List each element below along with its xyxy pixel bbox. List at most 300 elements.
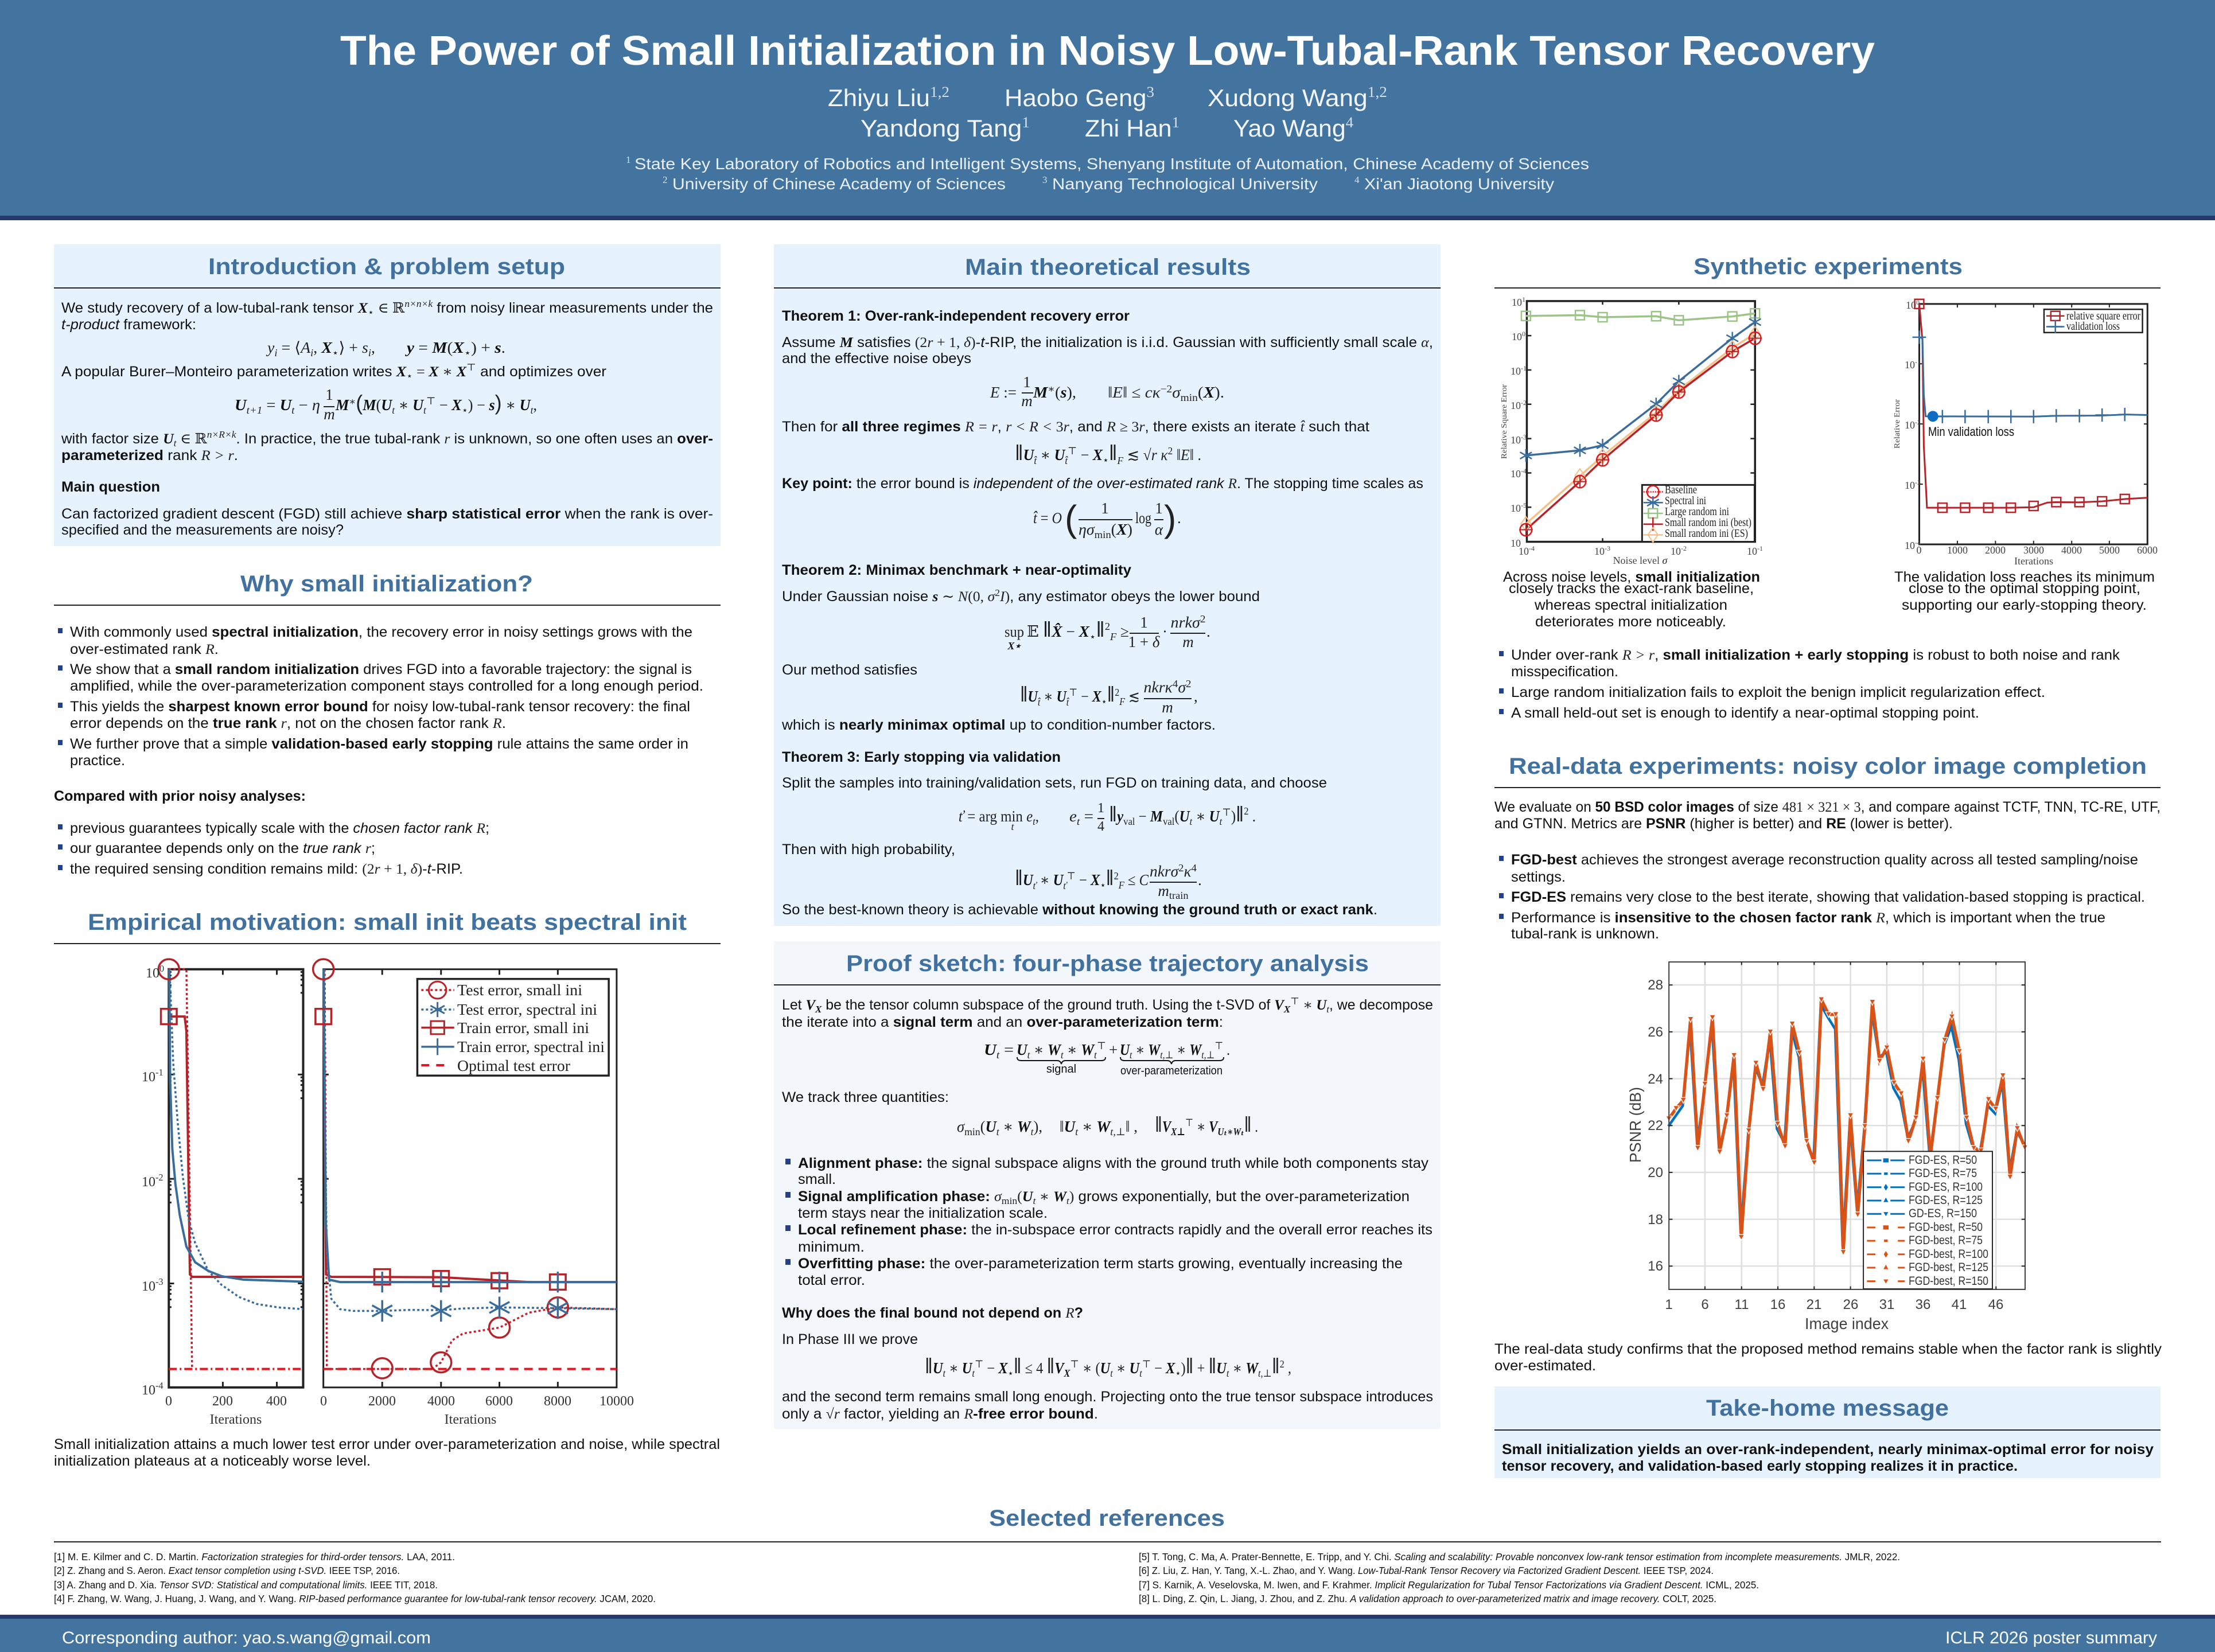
text block: decomposition intro: X [1283,1004,1291,1015]
equation: minimax lower bound: ≥ [1116,623,1129,640]
panel: introduction and problem setup [54,244,721,546]
bullet list: synthetic takeaways: A small held-out set is enough to identify a near-optimal stopping point. [1511,705,1979,721]
equation: phase III bound: t,⊥ [1258,1367,1272,1379]
equation: effective noise: σ [1172,384,1181,401]
chart labels: 1 [1522,295,1525,303]
equation: minimax lower bound: sup [1005,624,1024,640]
equation: effective noise: min [1181,392,1198,403]
equation: measurement model: ⟩ + [338,339,362,356]
bullet list: four phases: ) [1069,1189,1074,1205]
equation: phase III bound: U [1130,1359,1140,1377]
reference list: right column: [8] L. Ding, Z. Qin, L. Jiang, J. Zhou, and Z. Zhu. A validation approach to over-parameterized matrix and image recovery. COLT, 2025. [1139,1593,1716,1604]
theorem 2: 2 [995,587,1000,598]
axis labels: 16 [1770,1297,1785,1312]
chart labels: 6000 [2137,544,2158,556]
equation: phase III bound: 2 [1280,1358,1284,1370]
equation: gradient update: ⋆ [462,404,468,416]
equation: validation stopping rule: = [1080,808,1093,825]
header banner [0,0,2215,220]
chart labels [1893,298,2158,567]
chart labels: relative square error [2066,310,2140,322]
text block: dataset [1494,799,2160,832]
equation: minimax lower bound: ⋆ [1089,631,1096,642]
equation: stopping time: . [1177,509,1181,527]
panel: selected references [54,1506,2161,1604]
chart labels: 10 [1747,546,1757,557]
theorem 1: Key point: the error bound is independent of the over-estimated rank R. The stopping time scales as [782,476,1423,492]
axis labels: 10000 [600,1394,634,1409]
equation: stopping time: X) [1116,521,1132,538]
equation: measurement model: i [368,347,371,359]
text block: decomposition intro: ⊤ [1290,996,1299,1007]
axis labels [1626,977,2003,1332]
equation: phase III bound: U [962,1359,973,1377]
minimum validation loss marker [1928,411,1938,422]
panel: empirical motivation [54,910,721,1469]
equation: minimax lower bound: X⋆ [1007,640,1021,652]
chart labels: 10 [1905,419,1915,431]
chart labels: 10 [1905,359,1915,371]
equation: validation stopping rule: t [1190,816,1193,827]
equation: gradient update: s) ∗ U [489,391,531,415]
reference list: left column: [1] M. E. Kilmer and C. D. Martin. Factorization strategies for third-order tensors. LAA, 2011. [54,1551,455,1563]
equation: signal and over-parameterization decomposition: U [1017,1041,1028,1058]
axis labels: 28 [1648,977,1663,993]
equation: tracked quantities: ∗ [1193,1118,1209,1135]
legend labels: FGD-ES, R=125 [1909,1194,1983,1207]
equation: early stopping bound: − [1076,871,1091,889]
equation: phase III bound: ∗ [1229,1359,1245,1377]
axis labels: 11 [1735,1297,1749,1312]
bullet list: four phases: minimum. [798,1239,865,1255]
equation: signal and over-parameterization decomposition: t [1094,1049,1097,1061]
affiliations: 3 [1042,174,1048,185]
chart labels: Small random ini (ES) [1665,527,1748,540]
equation: stopping time [1033,498,1181,540]
equation: recovery bound: 2 [1168,445,1173,457]
equation: signal and over-parameterization decomposition: t [1130,1049,1132,1061]
affiliations: 2 [663,174,668,185]
equation: upper bound: ∗ [1040,688,1057,705]
equation: measurement model: X [321,339,333,356]
equation: gradient update: t [531,404,534,416]
equation: stopping time: α [1155,521,1163,538]
bullet list: main claims: amplified, while the over-parameterization component stays controlled for a long enough period. [70,678,703,694]
text block: recovery setup: n×n×k [404,298,433,309]
chart labels: Iterations [2014,555,2053,567]
equation: phase III bound: ⊤ [1142,1358,1151,1370]
chart labels: Relative Error [1893,399,1902,449]
panel: take-home message [1494,1386,2160,1478]
axis labels: Image index [1805,1315,1889,1332]
heading: introduction: Introduction & problem setup [208,254,565,279]
equation: recovery bound: E‖ . [1181,446,1202,463]
equation: measurement model: s [362,339,368,356]
axis labels: Iterations [210,1412,262,1427]
chart labels: validation loss [2066,320,2120,333]
chart labels: -4 [1521,467,1527,475]
corresponding author: Corresponding author: yao.s.wang@gmail.com [62,1628,431,1647]
equation: gradient update: ) − [468,396,489,414]
equation: gradient update: t [392,404,395,416]
text block: dataset: We evaluate on 50 BSD color images of size 481 × 321 × 3, and compare against TCTF, TNN, TC-RE, UTF, [1494,799,2160,815]
equation: gradient update: 1 [325,386,333,403]
axis labels: 10 [142,1383,155,1398]
text block: take-home message: Small initialization yields an over-rank-independent, nearly minimax-optimal error for noisy [1502,1441,2154,1458]
text block: decomposition intro: V [1274,998,1285,1013]
equation: tracked quantities: U [986,1118,997,1135]
legend labels: FGD-best, R=100 [1909,1248,1988,1261]
equation: early stopping bound: ⋆ [1100,879,1106,891]
equation: tracked quantities: ( [980,1118,986,1135]
equation: stopping time: min [1095,529,1111,540]
reference list: right column [1139,1551,1900,1604]
chart labels: 4000 [2061,544,2082,556]
text block: real-data conclusion: over-estimated. [1494,1358,1596,1374]
theorem 3: Split the samples into training/validation sets, run FGD on training data, and choose [782,775,1327,791]
bullet list: main claims: With commonly used spectral initialization , the recovery error in noisy settings grows with the [70,624,692,640]
equation: tracked quantities: ∗ [1078,1118,1096,1135]
equation: measurement model: A [301,339,310,356]
text: tracked quantities: We track three quantities: [782,1089,949,1105]
chart labels: 10 [1511,400,1521,411]
legend labels: FGD-ES, R=75 [1909,1167,1977,1180]
equation: validation stopping rule: t [1077,816,1080,827]
equation: gradient update: η [312,396,320,414]
equation: early stopping bound: 2 [1178,862,1184,874]
equation: measurement model: i [274,347,278,359]
chart labels: Noise level σ [1613,555,1668,566]
text block: over-parameterized rank: t [174,438,177,449]
equation: tracked quantities: min [964,1126,980,1137]
bullet list: synthetic takeaways: Under over-rank R > r, small initialization + early stopping is robust to both noise and rank [1511,647,2120,663]
equation: upper bound: ‖ [1107,683,1115,706]
reference list: left column: [3] A. Zhang and D. Xia. Tensor SVD: Statistical and computational limits. IEEE TIT, 2018. [54,1579,438,1591]
text block: over-parameterized rank: ∈ ℝ [177,431,207,447]
equation: validation stopping rule: t [1011,821,1014,832]
text block: take-home message: tensor recovery, and validation-based early stopping realizes it in practice. [1502,1458,2018,1474]
equation: upper bound: ⊤ [1069,687,1077,698]
equation: gradient update: , [533,396,537,414]
equation: gradient update: X [451,396,462,414]
axis labels: 20 [1648,1165,1663,1180]
text block: closing argument [782,1389,1433,1422]
caption: validation chart [1894,569,2155,613]
equation: tracked quantities: t [1031,1126,1034,1137]
authors: Yao Wang [1233,115,1343,142]
equation: validation stopping rule: M [1150,808,1163,825]
bullet list: four phases: term stays near the initialization scale. [798,1205,1048,1221]
equation: effective noise: s), [1060,384,1076,401]
heading: real-data experiments: Real-data experiments: noisy color image completion [1509,754,2147,779]
title: The Power of Small Initialization in Noisy Low-Tubal-Rank Tensor Recovery [340,28,1875,74]
theorem 1: Assume M satisfies (2r + 1, δ)-t-RIP, the initialization is i.i.d. Gaussian with sufficiently small scale α, [782,334,1433,350]
text block: decomposition intro: U [1316,998,1328,1013]
chart caption: Small initialization attains a much lower test error under over-parameterization and noise, while spectral [54,1436,720,1452]
line chart: relative square error versus noise level [1500,295,1763,566]
axis labels: 36 [1916,1297,1930,1312]
equation: validation stopping rule: t [1033,816,1036,827]
equation: gradient update: = [262,396,280,414]
chart caption: initialization plateaus at a noticeably worse level. [54,1453,371,1469]
equation: phase III bound: − [1151,1359,1166,1377]
text block: decomposition intro: t [1326,1004,1330,1015]
equation: early stopping bound [1015,862,1202,901]
heading: selected references: Selected references [989,1506,1225,1531]
equation: validation stopping rule: ⊤ [1222,806,1231,818]
chart labels: Small random ini (best) [1665,516,1751,529]
equation: gradient update: m [324,406,335,423]
equation: minimax lower bound: · [1162,623,1167,640]
equation: phase III bound: X [998,1359,1008,1377]
equation: upper bound: X [1092,688,1102,705]
affiliations: Nanyang Technological University [1052,175,1318,193]
equation: effective noise: ( [1198,384,1204,401]
chart labels: 10 [1906,299,1916,311]
equation: measurement model: y = M(X [407,339,463,356]
equation: signal and over-parameterization decomposition: U [984,1041,995,1058]
authors: 4 [1346,114,1353,131]
equation: stopping time: log [1135,509,1151,527]
heading: main results: Main theoretical results [965,255,1251,280]
legend labels: Optimal test error [457,1057,570,1074]
equation: gradient update: M [336,396,349,414]
equation: phase III bound: , [1284,1359,1291,1377]
equation: recovery bound: ≲ √ [1123,446,1151,463]
text block: parameterization: and optimizes over [476,364,606,380]
bullet list: comparison: our guarantee depends only on the true rank r; [70,840,375,856]
equation: signal and over-parameterization decomposition: = [999,1041,1014,1058]
equation: upper bound: − [1077,688,1092,705]
equation: recovery bound: t̂ [1065,455,1068,466]
bullet list: real-data findings [1499,852,2145,942]
equation: tracked quantities: ‖ , [1126,1118,1138,1135]
panel: real-data experiments [1494,754,2162,1374]
equation: recovery bound: t̂ [1034,455,1037,466]
legend box [417,979,609,1076]
equation: tracked quantities [957,1113,1258,1137]
caption: noise level chart: whereas spectral initialization [1534,597,1727,613]
bullet list: main claims: This yields the sharpest known error bound for noisy low-tubal-rank tensor recovery: the final [70,699,690,715]
equation: phase III bound: ‖ [1014,1354,1022,1378]
reference list: right column: [7] S. Karnik, A. Veselovska, M. Iwen, and F. Krahmer. Implicit Regularization for Tubal Tensor Factorizations via Gradient Descent. ICML, 2025. [1139,1579,1759,1591]
text block: over-parameterized rank: . In practice, the true tubal-rank [236,431,444,447]
equation: validation stopping rule: ‖y [1109,802,1124,826]
equation: stopping time: 1 [1155,500,1163,517]
subheading: rank independence: Why does the final bound not depend on R? [782,1305,1083,1321]
equation: signal and over-parameterization decomposition [984,1040,1230,1077]
equation: effective noise: −2 [1161,383,1172,395]
text block: recovery setup: t-product framework: [61,317,196,333]
equation: phase III bound: W [1245,1359,1259,1377]
text block: real-data conclusion [1494,1341,2162,1374]
equation: tracked quantities: ‖U [1060,1118,1075,1135]
equation: upper bound: 2 [1186,678,1191,689]
axis labels: 22 [1648,1118,1663,1133]
bullet list: main claims [58,624,703,769]
axis labels: 21 [1807,1297,1821,1312]
chart labels: -5 [1521,501,1527,509]
equation: upper bound: F [1119,696,1126,707]
equation: validation stopping rule: ) [1231,808,1236,825]
panel: main theoretical results [774,244,1441,926]
chart labels: 10 [1512,331,1522,342]
chart labels: 10 [1905,480,1915,491]
equation: effective noise: 1 [1023,373,1031,391]
equation: early stopping bound: 4 [1192,862,1197,874]
equation: stopping time: 1 [1101,500,1109,517]
authors: Yandong Tang [861,115,1014,142]
equation: recovery bound: r κ [1151,446,1169,463]
equation: effective noise: E := [990,384,1017,401]
equation: gradient update: U [412,396,424,414]
axis labels: 6000 [485,1394,513,1409]
affiliations: 4 [1354,174,1360,185]
chart labels: Relative Square Error [1500,384,1509,459]
axis labels: -1 [155,1067,164,1078]
equation: gradient update: t+1 [247,404,262,416]
legend labels: FGD-best, R=75 [1909,1234,1983,1247]
text block: decomposition intro: be the tensor column subspace of the ground truth. Using the t-SVD of [822,997,1274,1013]
bullet list: main claims: We show that a small random initialization drives FGD into a favorable trajectory: the signal is [70,661,692,677]
axis labels: Iterations [445,1412,496,1427]
text block: take-home message [1502,1441,2154,1474]
equation: phase III bound: t [1227,1367,1229,1379]
equation: validation stopping rule: ‖ [1236,802,1244,826]
text block: main question: Can factorized gradient descent (FGD) still achieve sharp statistical error when the rank is over- [61,506,713,522]
equation: signal and over-parameterization decomposition: . [1223,1041,1230,1058]
equation: stopping time: ησ [1079,521,1094,538]
axis labels: 0 [165,1394,172,1409]
equation: measurement model: ⋆ [332,347,338,359]
legend box [2044,309,2143,333]
authors: 1,2 [1368,84,1387,100]
axis labels: 6 [1701,1297,1709,1312]
equation: effective noise: ∗ [1048,383,1055,395]
caption: noise level chart: closely tracks the exact-rank baseline, [1509,580,1754,597]
bullet list: four phases: U [1022,1189,1034,1205]
chart labels: 10 [1905,540,1915,551]
equation: early stopping bound: ‖ [1106,866,1114,890]
equation: signal and over-parameterization decomposition: t,⊥ [1201,1049,1214,1061]
affiliations: Xi'an Jiaotong University [1364,175,1554,193]
bullet list: real-data findings: settings. [1511,869,1566,885]
text block: recovery setup: ⋆ [368,307,374,318]
chart labels: 0 [1522,330,1525,338]
panel: why small initialization [54,571,721,877]
bullet list: four phases: t [1033,1195,1037,1206]
bullet list: four phases: Alignment phase: the signal subspace aligns with the ground truth while both components stay [798,1155,1429,1171]
legend labels: FGD-ES, R=50 [1909,1154,1977,1167]
equation: validation stopping rule: , [1036,808,1039,825]
affiliations: 1 [626,154,631,165]
text block: decomposition intro: the iterate into a signal term and an over-parameterization term : [782,1014,1223,1030]
equation: early stopping bound: m [1158,882,1169,899]
equation: gradient update: ∗ [349,396,356,407]
text block: dataset: and GTNN. Metrics are PSNR (higher is better) and RE (lower is better). [1494,816,1953,832]
equation: gradient update: ( [356,391,363,415]
chart caption [54,1436,720,1469]
equation: stopping time: t̂ = O [1033,509,1062,527]
legend labels: Test error, small ini [457,981,582,999]
equation: effective noise: X). [1204,384,1224,401]
equation: upper bound: t̂ [1038,696,1041,708]
heading: take-home message: Take-home message [1706,1396,1949,1421]
theorem 1: Then for all three regimes R = r, r < R < 3r, and R ≥ 3r, there exists an iterate t̂ such that [782,419,1369,435]
equation: phase III bound: t [1110,1367,1114,1379]
equation: phase III bound: ⊤ [1070,1358,1079,1370]
text block: main question: specified and the measurements are noisy? [61,522,344,538]
heading: why small initialization: Why small initialization? [240,571,533,597]
equation: phase III bound: ) [1181,1359,1186,1377]
axis labels: 400 [266,1394,287,1409]
bullet list: real-data findings: tubal-rank is unknown. [1511,926,1659,942]
equation: phase III bound: ≤ 4 ‖V [1025,1354,1065,1378]
equation: phase III bound: t [1139,1367,1143,1379]
equation: measurement model: = ⟨ [278,339,301,356]
authors: 1,2 [930,84,949,100]
bullet list: synthetic takeaways [1499,647,2120,721]
authors: 1 [1172,114,1179,131]
equation: validation stopping rule: ť = arg min e [959,808,1033,825]
chart labels: -2 [1521,399,1527,407]
subheading: comparison: Compared with prior noisy analyses: [54,788,306,804]
axis labels: 26 [1843,1297,1858,1312]
axis labels: 10 [146,966,159,981]
authors: Haobo Geng [1005,84,1141,111]
equation: measurement model: , [371,339,375,356]
chart labels: Spectral ini [1665,494,1706,507]
axis labels: 10 [142,1279,155,1294]
equation: signal and over-parameterization decomposition: W [1148,1041,1162,1058]
equation: recovery bound: ⊤ [1068,445,1077,457]
equation: recovery bound: − [1077,446,1093,463]
chart labels: 10 [1511,365,1521,377]
equation: recovery bound: U [1054,446,1066,463]
equation: minimax lower bound: . [1206,623,1210,640]
axis labels: 26 [1648,1024,1663,1040]
equation: validation stopping rule: U [1209,808,1220,825]
text block: closing argument: only a √r factor, yielding an R-free error bound . [782,1406,1098,1422]
equation: minimax lower bound: 𝔼 ‖X̂ − X [1027,618,1089,641]
bullet list: four phases: W [1053,1189,1068,1205]
caption: validation chart: close to the optimal stopping point, [1909,580,2140,597]
equation: recovery bound: ‖ [1173,446,1181,463]
equation: measurement model: ) + [471,339,495,356]
authors: Zhiyu Liu [828,84,925,111]
equation: recovery bound: F [1116,455,1124,466]
legend labels: Test error, spectral ini [457,1001,597,1018]
equation: early stopping bound: ∗ [1037,871,1053,889]
axis labels: 200 [212,1394,233,1409]
chart labels: 5000 [2099,544,2120,556]
chart labels: 2000 [1985,544,2006,556]
bullet list: main claims: over-estimated rank R. [70,641,219,657]
axis labels: 1 [1665,1297,1673,1312]
bullet list: real-data findings: FGD-ES remains very close to the best iterate, showing that validation-based stopping is practical. [1511,889,2145,905]
text block: closing argument: and the second term remains small long enough. Projecting onto the true tensor subspace introduces [782,1389,1433,1405]
bullet list: comparison: previous guarantees typically scale with the chosen factor rank R; [70,820,489,836]
caption: validation chart: supporting our early-stopping theory. [1902,597,2147,613]
equation: signal and over-parameterization decomposition: signal [1046,1063,1076,1076]
theorem 3: So the best-known theory is achievable without knowing the ground truth or exact rank . [782,902,1377,918]
caption: noise level chart [1503,569,1760,630]
chart labels [1500,295,1763,566]
equation: phase III bound: X [1165,1359,1175,1377]
equation: signal and over-parameterization decomposition: W [1048,1041,1061,1058]
equation: tracked quantities: t [996,1126,1000,1137]
equation: validation stopping rule: val [1163,816,1174,827]
